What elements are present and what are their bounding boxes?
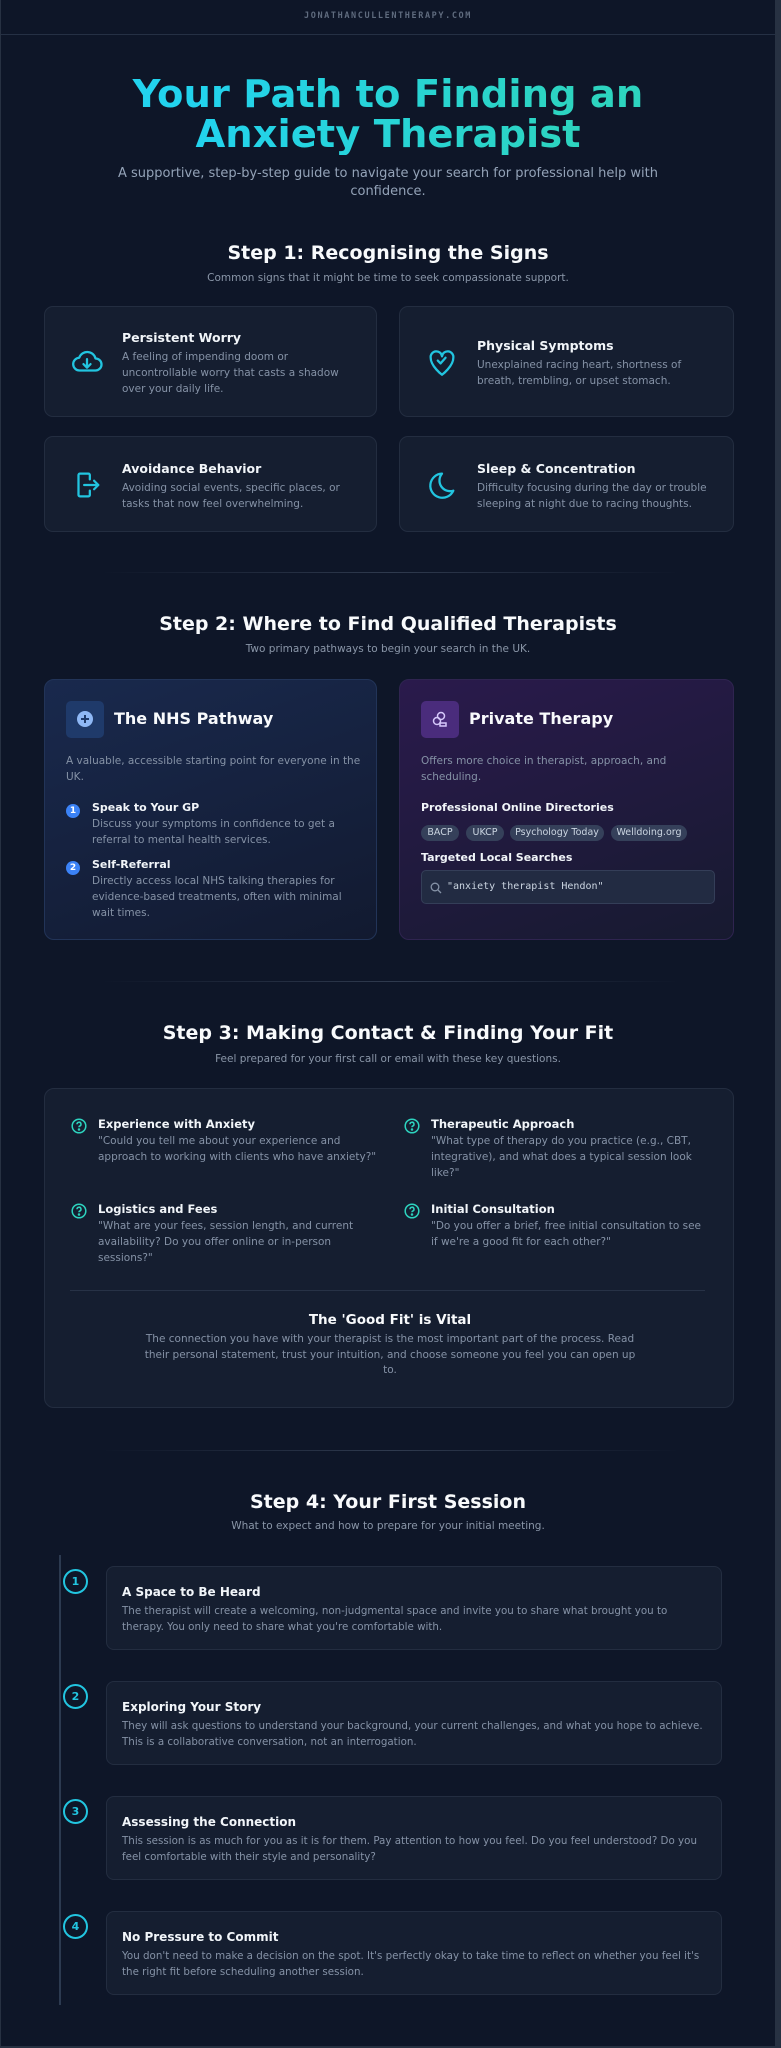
question: experience: approach to working with clients who have anxiety?" (98, 1151, 376, 1163)
subtitle (118, 166, 658, 199)
title: Avoidance Behavior (122, 461, 261, 476)
title: Your Path to Finding an (133, 72, 643, 117)
timeline step 2 (63, 1681, 722, 1765)
timeline step 1: therapy. You only need to share what you're comfortable with. (122, 1621, 442, 1633)
step 1 heading: Step 1: Recognising the Signs (227, 242, 549, 264)
question: consultation (404, 1202, 701, 1248)
timeline step 3: This session is as much for you as it is for them. Pay attention to how you feel. Do you feel understood? Do you (122, 1835, 697, 1847)
site url: JONATHANCULLENTHERAPY.COM (304, 11, 472, 21)
icon: moon (429, 472, 454, 499)
callout: good fit: The 'Good Fit' is Vital (309, 1312, 471, 1328)
question: approach: like?" (431, 1167, 459, 1179)
icon: plus (66, 701, 104, 738)
panel: NHS pathway (44, 679, 377, 940)
title: Physical Symptoms (477, 338, 614, 353)
timeline step 4: the right fit before scheduling another session. (122, 1966, 364, 1978)
timeline step 2: Exploring Your Story (122, 1700, 261, 1714)
description: A valuable, accessible starting point for everyone in the (66, 755, 360, 767)
panel: private therapy: Welldoing.org (616, 827, 682, 838)
timeline step 1 (63, 1566, 722, 1650)
text: Difficulty focusing during the day or trouble (477, 482, 707, 494)
description (66, 755, 360, 783)
search box: "anxiety therapist Hendon" (447, 881, 604, 892)
question: consultation: Initial Consultation (431, 1202, 555, 1216)
panel: private therapy (399, 679, 734, 940)
title: Anxiety Therapist (195, 112, 581, 157)
icon: door exit (77, 472, 100, 498)
item 2: evidence-based treatments, often with minimal (92, 891, 342, 903)
step 2 subheading: Two primary pathways to begin your search in the UK. (246, 643, 530, 655)
icon: users (421, 701, 459, 738)
title: Private Therapy (469, 709, 613, 728)
question: experience: Experience with Anxiety (98, 1117, 255, 1131)
text (122, 351, 339, 395)
question: logistics (71, 1202, 353, 1264)
item 1 (66, 801, 335, 846)
question: logistics: "What are your fees, session length, and current (98, 1220, 353, 1232)
tag chips (421, 825, 687, 841)
question: experience (71, 1117, 376, 1163)
card: avoidance (44, 436, 377, 532)
question: approach (404, 1117, 692, 1179)
timeline step 3 (63, 1796, 722, 1880)
text: uncontrollable worry that casts a shadow (122, 367, 339, 379)
search box (421, 870, 715, 904)
timeline step 1: A Space to Be Heard (122, 1585, 261, 1599)
question: logistics: Logistics and Fees (98, 1202, 217, 1216)
icon: heart check (430, 350, 454, 376)
title: Sleep & Concentration (477, 461, 636, 476)
question: consultation: if we're a good fit for each other?" (431, 1236, 611, 1248)
timeline step 2: 2 (72, 1690, 79, 1703)
question: logistics: sessions?" (98, 1252, 153, 1264)
description: UK. (66, 771, 84, 783)
question: approach: Therapeutic Approach (431, 1117, 574, 1131)
step 4 heading: Step 4: Your First Session (250, 1491, 526, 1513)
timeline step 4 (63, 1911, 722, 1995)
card: persistent worry (44, 306, 377, 417)
title: The NHS Pathway (114, 709, 273, 728)
callout: good fit: their personal statement, trust your intuition, and choose someone you feel you can open up (145, 1349, 635, 1361)
timeline step 2: This is a collaborative conversation, not an interrogation. (122, 1736, 417, 1748)
timeline step 3: feel comfortable with their style and personality? (122, 1851, 376, 1863)
step 4 subheading: What to expect and how to prepare for your initial meeting. (231, 1520, 545, 1532)
question: consultation: "Do you offer a brief, free initial consultation to see (431, 1220, 701, 1232)
text: over your daily life. (122, 383, 224, 395)
question: experience: "Could you tell me about your experience and (98, 1135, 340, 1147)
step 3 heading: Step 3: Making Contact & Finding Your Fit (163, 1022, 613, 1044)
step 1 subheading: Common signs that it might be time to seek compassionate support. (207, 272, 569, 284)
timeline step 4: 4 (72, 1920, 79, 1933)
item 1: referral to mental health services. (92, 834, 271, 846)
item 2: wait times. (92, 907, 150, 919)
item 2: 2 (70, 863, 76, 873)
item 1: Speak to Your GP (92, 801, 199, 814)
description: Offers more choice in therapist, approach, and (421, 755, 666, 767)
text: breath, trembling, or upset stomach. (477, 375, 671, 387)
card: physical symptoms (399, 306, 734, 417)
icon: cloud download (72, 350, 103, 372)
subtitle: A supportive, step-by-step guide to navigate your search for professional help with (118, 166, 658, 181)
header bar (1, 0, 775, 35)
callout: good fit (145, 1312, 635, 1376)
subtitle: confidence. (350, 184, 426, 199)
question: approach: integrative), and what does a typical session look (431, 1151, 692, 1163)
question: approach: "What type of therapy do you practice (e.g., CBT, (431, 1135, 691, 1147)
description: scheduling. (421, 771, 481, 783)
step 2 heading: Step 2: Where to Find Qualified Therapists (159, 613, 617, 635)
item 1: 1 (70, 806, 76, 816)
question: logistics: availability? Do you offer online or in-person (98, 1236, 331, 1248)
text: Unexplained racing heart, shortness of (477, 359, 681, 371)
callout: good fit: to. (383, 1364, 397, 1376)
title: Persistent Worry (122, 330, 241, 345)
text (477, 359, 682, 387)
panel: private therapy: BACP (427, 827, 453, 838)
title (1, 75, 775, 155)
text (477, 482, 707, 510)
text: sleeping at night due to racing thoughts. (477, 498, 692, 510)
timeline step 1: 1 (72, 1575, 79, 1588)
panel: private therapy: Psychology Today (515, 827, 599, 838)
item 1: Discuss your symptoms in confidence to get a (92, 818, 335, 830)
text: tasks that now feel overwhelming. (122, 498, 303, 510)
panel: key questions (44, 1088, 734, 1408)
timeline step 3: 3 (72, 1805, 79, 1818)
text: A feeling of impending doom or (122, 351, 288, 363)
callout: good fit: The connection you have with your therapist is the most important part of the process. Read (146, 1333, 634, 1345)
timeline step 2: They will ask questions to understand your background, your current challenges, and what you hope to achieve. (122, 1720, 703, 1732)
text (122, 482, 340, 510)
step 3 subheading: Feel prepared for your first call or email with these key questions. (215, 1053, 561, 1065)
card: sleep (399, 436, 734, 532)
timeline (59, 1555, 61, 2005)
local searches label: Targeted Local Searches (421, 851, 572, 864)
timeline step 4: You don't need to make a decision on the spot. It's perfectly okay to take time to reflect on whether you feel it's (122, 1950, 699, 1962)
timeline step 1: The therapist will create a welcoming, non-judgmental space and invite you to share what brought you to (122, 1605, 667, 1617)
item 2: Directly access local NHS talking therapies for (92, 875, 335, 887)
text: Avoiding social events, specific places, or (122, 482, 340, 494)
timeline step 3: Assessing the Connection (122, 1815, 296, 1829)
item 2 (66, 858, 342, 919)
timeline step 4: No Pressure to Commit (122, 1930, 278, 1944)
item 2: Self-Referral (92, 858, 171, 871)
description (421, 755, 666, 783)
directories label: Professional Online Directories (421, 801, 614, 814)
panel: private therapy: UKCP (472, 827, 498, 838)
